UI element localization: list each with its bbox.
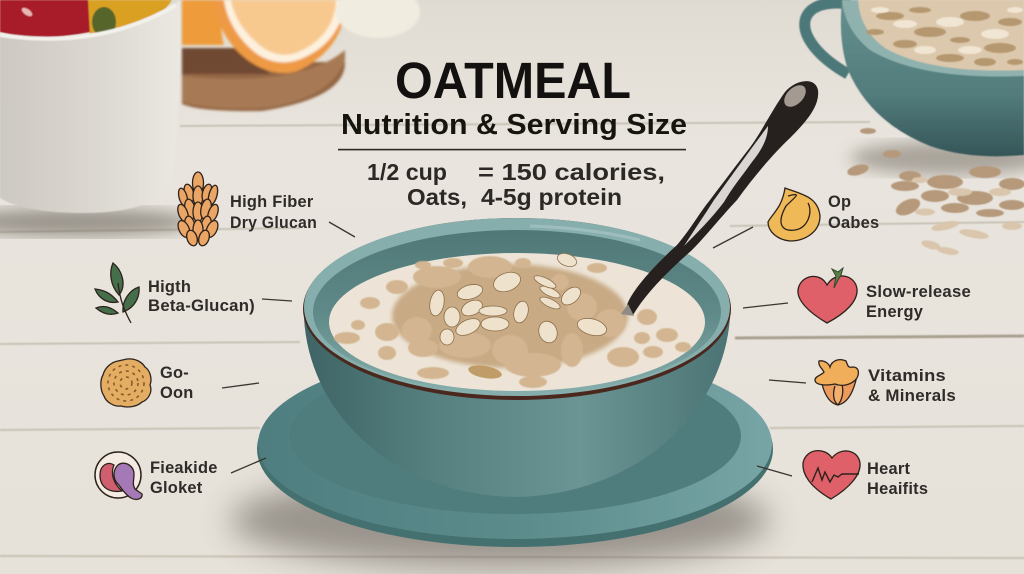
callout: Op Oabes: Op bbox=[828, 193, 851, 211]
callout: Fieakide Gloket: Fieakide bbox=[150, 459, 218, 477]
icon: green leaves bbox=[95, 263, 139, 323]
serving information bbox=[338, 149, 686, 210]
callout: Slow-release Energy: Energy bbox=[866, 303, 924, 321]
scattered oats, right bbox=[846, 128, 1024, 256]
callout: Fieakide Gloket: Gloket bbox=[150, 479, 203, 497]
callout: Op Oabes bbox=[713, 188, 879, 248]
serving information: 4-5g protein bbox=[481, 184, 622, 210]
callout: Vitamins & Minerals: & Minerals bbox=[868, 387, 956, 405]
spoon bbox=[621, 81, 818, 316]
oats in cup bbox=[866, 7, 1023, 66]
callout: Slow-release Energy bbox=[743, 268, 971, 323]
callout: Go-Oon: Oon bbox=[160, 384, 194, 402]
callout: High Fiber bbox=[176, 172, 355, 247]
teal cup with oats, top right bbox=[805, 0, 1024, 175]
orange slices on wooden board bbox=[182, 0, 420, 111]
serving information: 1/2 cup bbox=[367, 159, 447, 185]
callout: Op Oabes: Oabes bbox=[828, 214, 879, 232]
icon: red apple heart bbox=[798, 268, 857, 323]
callout: Beta-Glucan: Higth bbox=[148, 278, 191, 296]
callout: Heart Health: Heaifits bbox=[867, 480, 928, 498]
callout: Beta-Glucan: Beta-Glucan) bbox=[148, 297, 255, 315]
subtitle: Nutrition & Serving Size bbox=[341, 109, 687, 141]
callout: Beta-Glucan bbox=[95, 263, 292, 323]
icon: oat cluster bbox=[101, 359, 151, 407]
callout: Vitamins & Minerals: Vitamins bbox=[868, 367, 946, 385]
callout: Heart Health bbox=[757, 451, 928, 499]
callout: High Fiber: High Fiber bbox=[230, 193, 314, 211]
callout: Vitamins & Minerals bbox=[769, 360, 956, 405]
icon: wheat grain bbox=[176, 172, 220, 247]
callout: Go-Oon bbox=[101, 359, 259, 407]
title: OATMEAL bbox=[395, 52, 631, 109]
porridge with oat flakes bbox=[334, 251, 691, 388]
icon: yellow seed bbox=[768, 188, 820, 241]
callout: Fieakide Gloket bbox=[95, 452, 266, 499]
serving information: Oats, bbox=[407, 184, 467, 210]
icon: purple circle bbox=[95, 452, 142, 499]
white cup with fruit, top left bbox=[0, 0, 195, 236]
callout: Go-Oon: Go- bbox=[160, 364, 189, 382]
icon: orange flower bbox=[815, 360, 858, 405]
callout: Heart Health: Heart bbox=[867, 460, 910, 478]
callout: Slow-release Energy: Slow-release bbox=[866, 283, 971, 301]
serving information: = 150 calories, bbox=[478, 159, 665, 185]
plate bbox=[230, 349, 773, 568]
bowl bbox=[303, 218, 731, 497]
icon: heart with pulse bbox=[803, 451, 860, 499]
callout: High Fiber: Dry Glucan bbox=[230, 214, 317, 232]
